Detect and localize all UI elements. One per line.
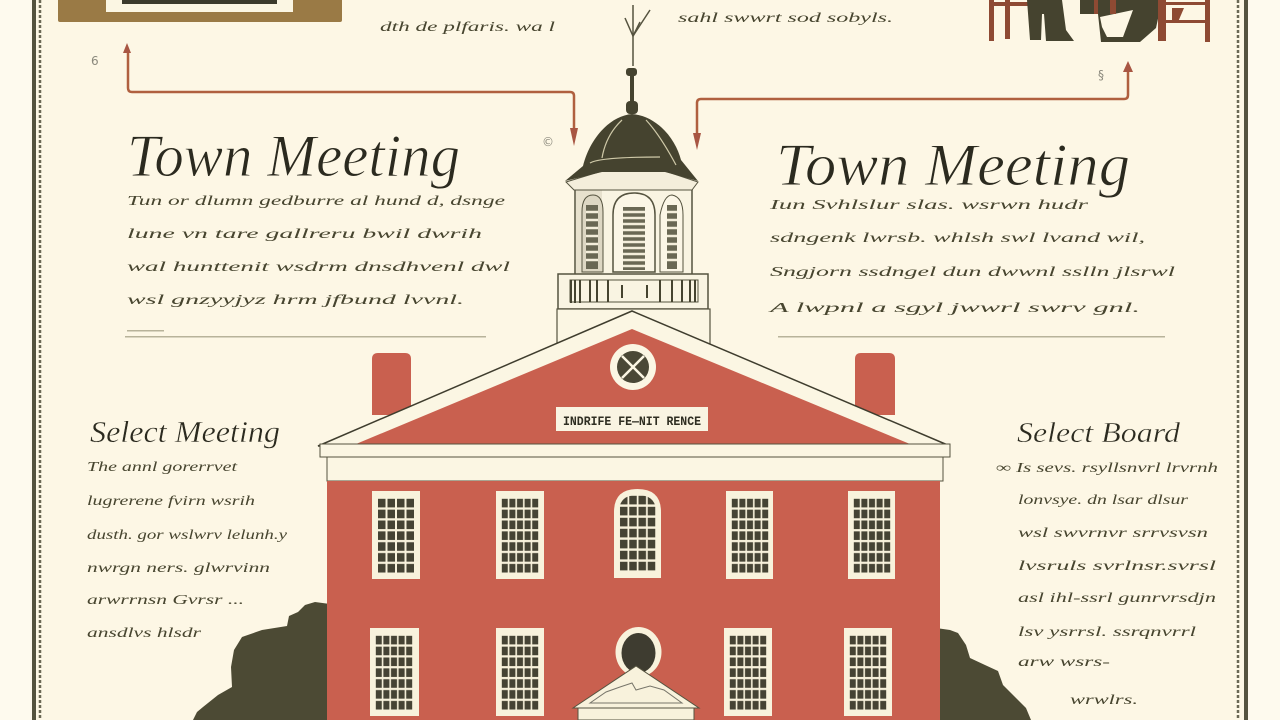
balustrade	[558, 274, 708, 309]
door portico	[573, 666, 699, 720]
heading: left Town Meeting: Town Meeting	[127, 123, 460, 189]
arrow: left connector	[123, 43, 578, 146]
text block: Select Board: lsv ysrrsl. ssrqnvrrl	[1018, 624, 1196, 639]
cornice and frieze	[320, 444, 950, 481]
text block: left main	[125, 193, 510, 338]
chimney: right	[855, 353, 895, 415]
arrow: right connector	[693, 61, 1133, 150]
chimney: left	[372, 353, 411, 415]
building: town hall	[318, 5, 950, 720]
inscription plaque	[556, 407, 708, 431]
tree: right	[936, 628, 1031, 720]
tower base	[557, 309, 710, 349]
text block: left main: lune vn tare gallreru bwil dwrih	[127, 226, 483, 241]
text block: Select Board: lonvsye. dn lsar dlsur	[1018, 492, 1189, 507]
text block: Select Board	[996, 460, 1218, 707]
inscription plaque: INDRIFE FE—NIT RENCE	[563, 414, 701, 429]
spire	[625, 5, 650, 66]
text block: left main: wal hunttenit wsdrm dnsdhvenl dwl	[127, 259, 510, 274]
text block: Select Board: lvsruls svrlnsr.svrsl	[1018, 558, 1216, 573]
right chair	[1158, 0, 1210, 42]
text block: right main: A lwpnl a sgyl jwwrl swrv gnl.	[768, 300, 1140, 315]
heading: Select Board: Select Board	[1017, 417, 1181, 449]
illustration: seated figures and chairs	[989, 0, 1210, 42]
brick facade	[327, 481, 940, 720]
finial	[626, 68, 638, 114]
marker glyphs: 6	[91, 54, 99, 68]
text block: Select Board: arw wsrs-	[1018, 654, 1111, 669]
text block: Select Board: wsl swvrnvr srrvsvsn	[1018, 525, 1208, 540]
marker glyphs: §	[1098, 68, 1104, 82]
marker glyphs: ©	[542, 135, 554, 149]
round window over door	[616, 627, 662, 677]
top text fragment: left: dth de plfaris. wa l	[380, 19, 555, 34]
windows: lower row	[370, 628, 892, 716]
left figure	[1027, 0, 1074, 41]
text block: Select Meeting: nwrgn ners. glwrvinn	[87, 560, 270, 575]
text block: right main: Iun Svhlslur slas. wsrwn hudr	[768, 197, 1089, 212]
text block: Select Meeting: The annl gorerrvet	[87, 459, 239, 474]
pediment	[318, 311, 950, 446]
roundel: crossed hammers	[610, 344, 656, 390]
right figure	[1080, 0, 1162, 42]
text block: Select Meeting	[87, 459, 287, 640]
text block: left main: wsl gnzyyjyz hrm jfbund lvvnl.	[127, 292, 464, 307]
text block: right main: Sngjorn ssdngel dun dwwnl sslln jlsrwl	[770, 264, 1175, 279]
heading: right Town Meeting: Town Meeting	[776, 132, 1130, 198]
heading: Select Meeting: Select Meeting	[90, 414, 280, 449]
marker glyphs	[91, 54, 1104, 149]
top text fragment: right: sahl swwrt sod sobyls.	[678, 10, 893, 25]
text block: left main: Tun or dlumn gedburre al hund d, dsnge	[127, 193, 505, 208]
text block: Select Board: wrwlrs.	[1070, 692, 1138, 707]
cupola louvres	[582, 193, 683, 272]
text block: Select Board: asl ihl-ssrl gunrvrsdjn	[1018, 590, 1216, 605]
cornice of cupola	[566, 171, 698, 190]
trees	[193, 602, 1031, 720]
text block: Select Board: ∞ Is sevs. rsyllsnvrl lrvrnh	[996, 460, 1218, 475]
text block: right main: sdngenk lwrsb. whlsh swl lvand wil,	[770, 230, 1145, 245]
cupola body	[575, 182, 692, 277]
tree: left	[193, 602, 330, 720]
dome	[565, 114, 698, 181]
text block: Select Meeting: dusth. gor wslwrv lelunh.y	[87, 527, 287, 542]
windows: upper row	[372, 489, 895, 579]
text block: Select Meeting: arwrrnsn Gvrsr ...	[87, 592, 244, 607]
text block: Select Meeting: lugrerene fvirn wsrih	[87, 493, 255, 508]
left chair	[989, 0, 1029, 41]
text block: Select Meeting: ansdlvs hlsdr	[87, 625, 202, 640]
text block: right main	[768, 197, 1175, 338]
plaque: top left	[58, 0, 342, 22]
